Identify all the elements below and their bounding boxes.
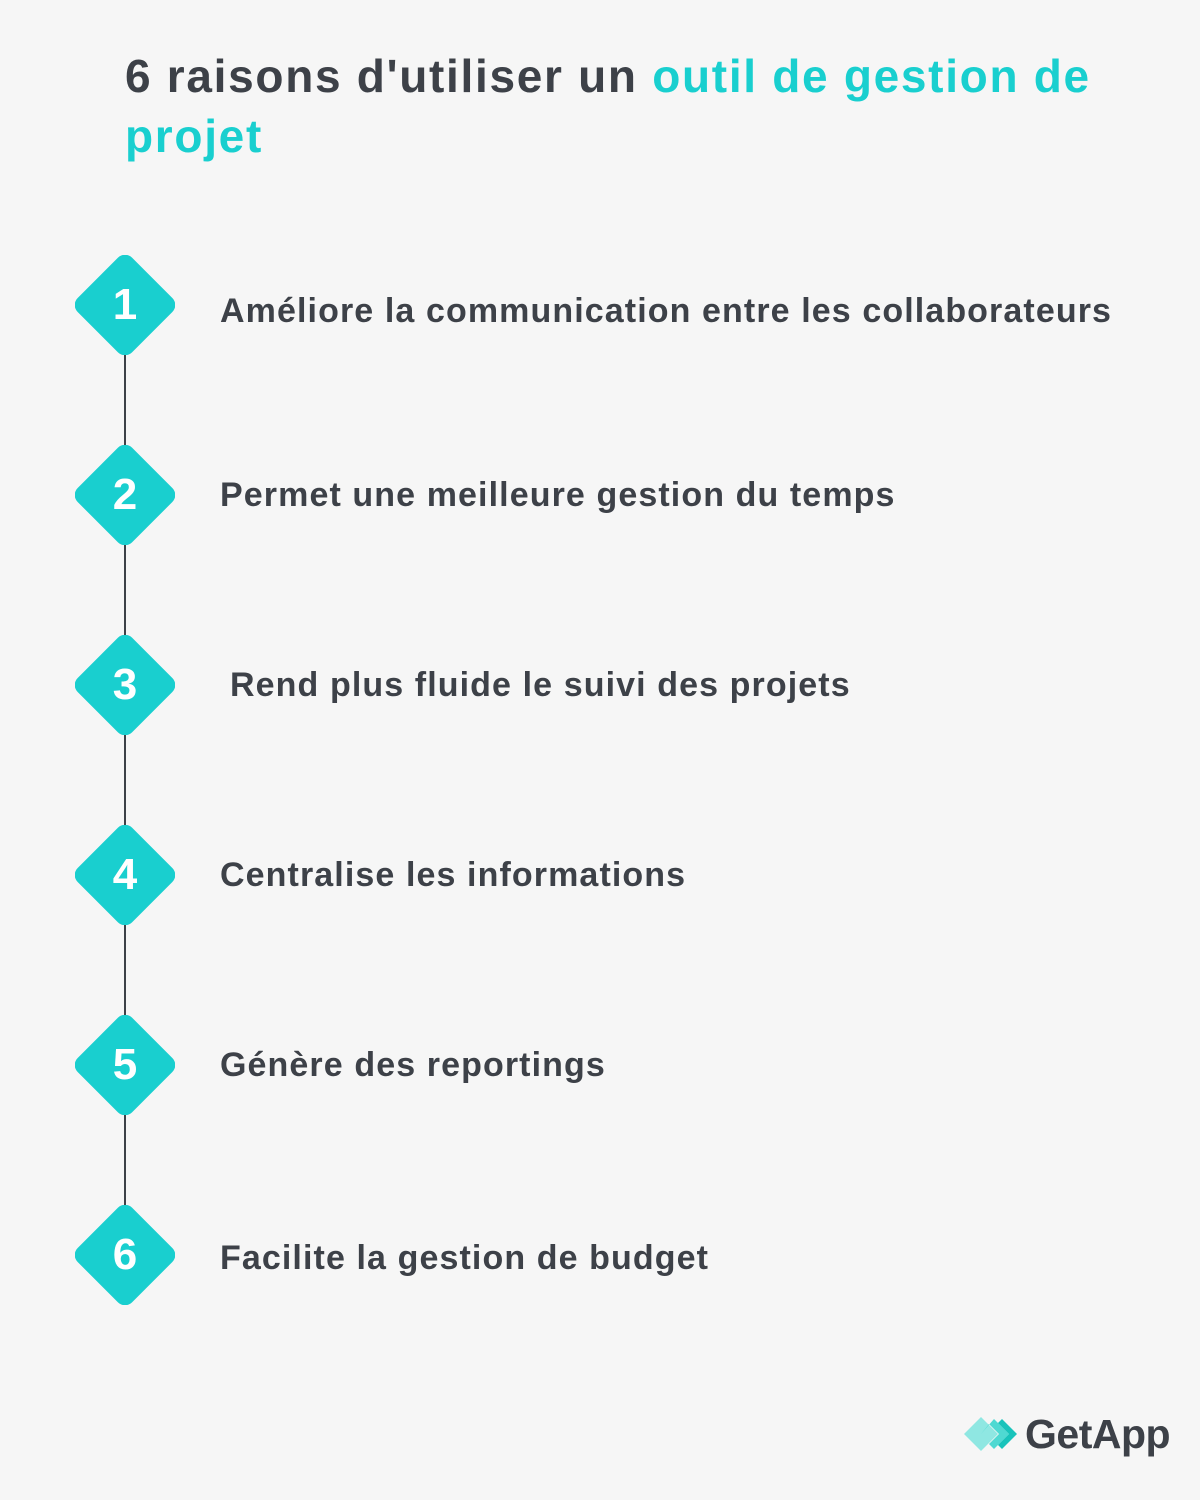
item 2: [75, 445, 175, 545]
item 6: 6: [113, 1230, 137, 1279]
text 3: Rend plus fluide le suivi des projets: [230, 666, 851, 704]
text 4: Centralise les informations: [220, 856, 686, 894]
text 2: Permet une meilleure gestion du temps: [220, 476, 896, 514]
item 1: 1: [113, 280, 137, 329]
item 4: [75, 825, 175, 925]
item 6: [75, 1205, 175, 1305]
item 3: [75, 635, 175, 735]
item 1: [75, 255, 175, 355]
text 5: Génère des reportings: [220, 1046, 606, 1084]
text 6: Facilite la gestion de budget: [220, 1239, 709, 1277]
logo: GetApp: GetApp: [1025, 1411, 1170, 1457]
item 2: 2: [113, 470, 137, 519]
text 1: Améliore la communication entre les collaborateurs: [220, 292, 1112, 330]
item 3: 3: [113, 660, 137, 709]
item 5: 5: [113, 1040, 137, 1089]
item 4: 4: [113, 850, 137, 899]
timeline line: [124, 330, 126, 1230]
title: 6 raisons d'utiliser un outil de gestion de projet: [125, 50, 1091, 162]
item 5: [75, 1015, 175, 1115]
